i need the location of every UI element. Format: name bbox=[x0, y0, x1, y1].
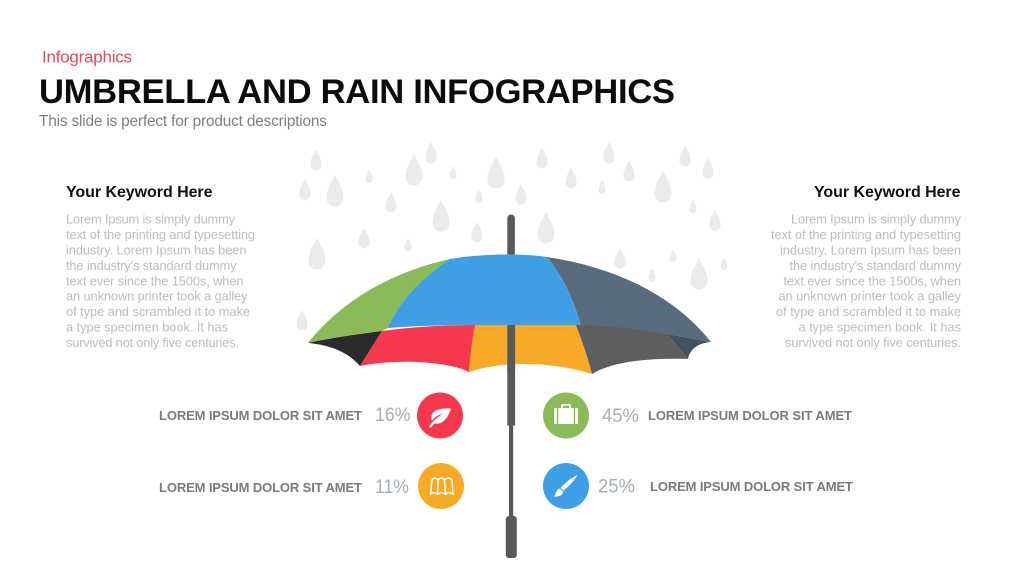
right body text: text ever since the 1500s, when bbox=[784, 273, 961, 288]
icon: map in orange circle bbox=[418, 463, 464, 509]
icon: leaf in red circle bbox=[417, 392, 463, 438]
left body text: Lorem Ipsum is simply dummy bbox=[66, 212, 236, 226]
canopy: orange panel bbox=[469, 325, 592, 374]
rain drops bbox=[296, 142, 727, 330]
panel: right keyword text bbox=[771, 184, 962, 350]
percent: 25% bbox=[598, 476, 635, 498]
title: UMBRELLA AND RAIN INFOGRAPHICS bbox=[39, 73, 675, 111]
canopy: black rib bbox=[308, 331, 382, 366]
canopy: red panel bbox=[360, 325, 475, 372]
canopy: gray panel bbox=[576, 325, 688, 374]
canopy: dark slate fold bbox=[667, 334, 711, 359]
left body text bbox=[66, 212, 255, 350]
right body text: the industry's standard dummy bbox=[790, 258, 962, 273]
item: 45% bbox=[543, 392, 852, 438]
subtitle: This slide is perfect for product descriptions bbox=[39, 113, 327, 130]
item label: LOREM IPSUM DOLOR SIT AMET bbox=[648, 408, 852, 423]
icon: paint brush in blue circle bbox=[543, 463, 589, 509]
left body text: text ever since the 1500s, when bbox=[66, 273, 244, 288]
right keyword heading: Your Keyword Here bbox=[814, 184, 961, 201]
right body text: Lorem Ipsum is simply dummy bbox=[791, 212, 962, 226]
percent: 45% bbox=[602, 406, 639, 427]
item: 16% bbox=[159, 392, 463, 438]
left body text: an unknown printer took a galley bbox=[66, 289, 248, 304]
icon: briefcase in green circle bbox=[543, 392, 589, 438]
umbrella shaft bbox=[506, 214, 517, 558]
percent: 16% bbox=[375, 405, 411, 426]
right body text: an unknown printer took a galley bbox=[778, 289, 962, 304]
left body text: of type and scrambled it to make bbox=[66, 304, 250, 319]
canopy: blue panel bbox=[388, 255, 581, 328]
left keyword heading: Your Keyword Here bbox=[66, 184, 213, 201]
left body text: a type specimen book. It has bbox=[66, 320, 228, 334]
item label: LOREM IPSUM DOLOR SIT AMET bbox=[159, 480, 362, 495]
right body text: text of the printing and typesetting bbox=[771, 227, 961, 242]
right body text: survived not only five centuries. bbox=[785, 335, 961, 350]
umbrella bbox=[308, 214, 711, 558]
percent: 11% bbox=[375, 477, 409, 498]
left body text: survived not only five centuries. bbox=[66, 335, 239, 350]
item label: LOREM IPSUM DOLOR SIT AMET bbox=[650, 479, 853, 494]
item: 11% bbox=[159, 463, 464, 509]
right body text: of type and scrambled it to make bbox=[776, 304, 961, 319]
right body text: industry. Lorem Ipsum has been bbox=[780, 242, 961, 258]
item: 25% bbox=[543, 463, 853, 509]
left body text: industry. Lorem Ipsum has been bbox=[66, 242, 246, 258]
canopy: slate panel bbox=[547, 257, 711, 342]
eyebrow label: Infographics bbox=[42, 48, 132, 66]
right body text bbox=[771, 212, 962, 350]
canopy: green panel bbox=[308, 259, 450, 343]
item label: LOREM IPSUM DOLOR SIT AMET bbox=[159, 408, 362, 423]
right body text: a type specimen book. It has bbox=[798, 320, 961, 334]
panel: left keyword text bbox=[66, 184, 255, 350]
shaft through orange panel bbox=[507, 325, 515, 373]
left body text: the industry's standard dummy bbox=[66, 258, 237, 273]
left body text: text of the printing and typesetting bbox=[66, 227, 255, 242]
